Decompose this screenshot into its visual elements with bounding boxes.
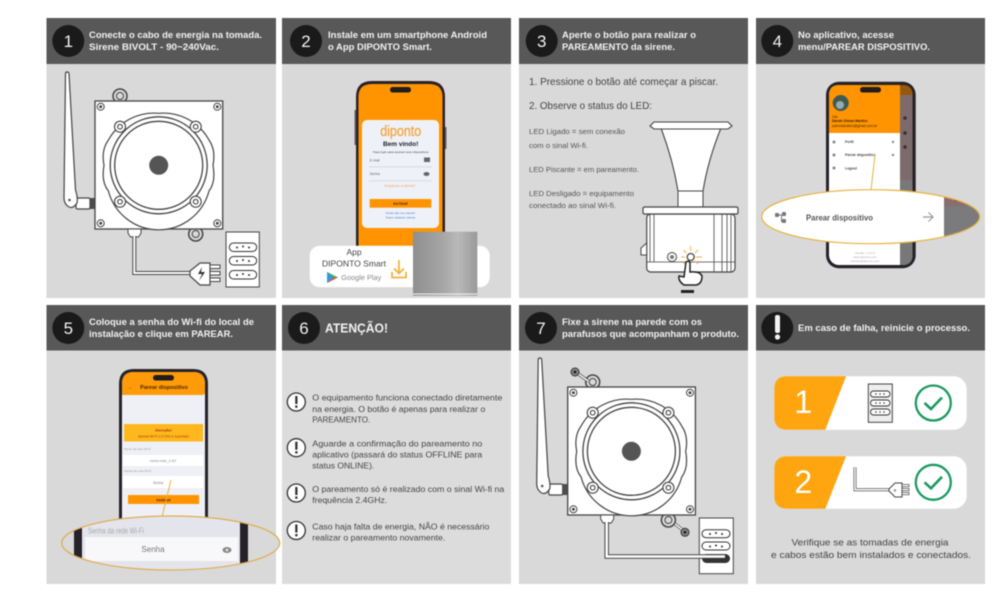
instructions	[529, 76, 718, 112]
panel: step 4	[756, 18, 985, 298]
icon: wall outlet	[226, 232, 259, 287]
callout line	[871, 155, 875, 190]
LED status legend: LED Ligado = sem conexão	[529, 129, 625, 136]
note 2	[312, 438, 483, 470]
login card	[362, 120, 439, 228]
header: step 4: No aplicativo, acesse	[798, 30, 894, 41]
icon: cable and plug: +	[893, 488, 897, 494]
header: step 1: Sirene BIVOLT - 90~240Vac.	[89, 42, 219, 53]
header: step 7: 7	[536, 319, 546, 338]
icon: warning 4	[287, 522, 305, 540]
badge: app download: DIPONTO Smart	[322, 259, 387, 269]
header: step 2: Instale em um smartphone Android	[328, 30, 487, 41]
note 1	[312, 393, 503, 424]
panel: step 5	[46, 305, 288, 584]
note 4: Caso haja falta de energia, NÃO é necessário	[312, 522, 490, 532]
phone: pairing screen: Nome da rede Wi-Fi	[124, 447, 151, 451]
closing note: e cabos estão bem instalados e conectados.	[771, 550, 971, 560]
header: step 6: ATENÇÃO!	[325, 320, 388, 336]
header: step 7: parafusos que acompanham o produto.	[562, 329, 739, 340]
note 1: PAREAMENTO.	[312, 414, 370, 424]
phone: pairing screen	[119, 369, 208, 520]
header: step 7	[519, 305, 748, 350]
header: step 3: Aperte o botão para realizar o	[562, 30, 696, 41]
callout: Senha field: Senha da rede Wi-Fi	[88, 526, 144, 536]
login card: Esqueceu a senha?	[385, 184, 416, 188]
header: step 7: Fixe a sirene na parede com os	[562, 317, 702, 328]
note 3: frequência 2.4GHz.	[312, 495, 387, 505]
illustration: siren top view with antenna and cable	[64, 72, 223, 241]
icon: wall outlet with plug	[699, 518, 733, 574]
phone: app menu: www.diponto.com	[853, 255, 877, 259]
cable	[134, 236, 190, 273]
note 4: realizar o pareamento novamente.	[312, 533, 445, 543]
phone: app menu: Dande Dimas Martins	[832, 119, 868, 123]
LED status legend: conectado ao sinal Wi-fi.	[529, 203, 616, 210]
header: step 4	[756, 18, 985, 64]
header: failure: Em caso de falha, reinicie o processo.	[798, 323, 970, 334]
header: step 1	[46, 18, 276, 64]
panel: step 1	[46, 18, 276, 298]
phone: pairing screen: Parear dispositivo	[140, 385, 188, 391]
check card 2: 2	[794, 464, 812, 500]
phone: app menu	[826, 82, 916, 268]
phone: pairing screen: ←	[128, 385, 133, 391]
blurred QR code	[413, 232, 477, 296]
login card: ENTRAR	[393, 202, 408, 206]
icon: pairing	[775, 212, 786, 223]
icon: screw top	[571, 368, 588, 381]
LED status legend: com o sinal Wi-fi.	[529, 143, 588, 150]
icon: check	[916, 465, 951, 500]
phone: pairing screen: Atenção!	[155, 428, 172, 432]
header: step 3	[519, 18, 748, 64]
header: step 1: Conecte o cabo de energia na tomada.	[89, 30, 262, 41]
header: step 6: 6	[299, 319, 309, 338]
LED rays	[681, 246, 702, 264]
panel: step 2	[282, 18, 511, 298]
phone: pairing screen: Senha	[153, 481, 163, 485]
note 2: Aguarde a confirmação do pareamento no	[312, 438, 483, 448]
note 3	[312, 484, 505, 505]
icon: exclamation	[775, 315, 780, 340]
cable plugged in	[607, 522, 725, 556]
login card: Fazer cadastro cliente	[386, 216, 416, 220]
phone: pairing screen: Senha da rede Wi-Fi	[124, 469, 152, 473]
note 4	[312, 522, 490, 543]
LED status legend: LED Piscante = em pareamento.	[529, 167, 639, 174]
cable inner	[134, 236, 190, 273]
phone: app menu: Versão: 1.0.0.0	[855, 251, 875, 255]
login card: Ainda não sou cliente!	[386, 211, 415, 215]
phone: app login screen	[354, 81, 446, 250]
header: step 2	[282, 18, 511, 64]
LED status legend: LED Desligado = equipamento	[529, 191, 634, 198]
closing note	[771, 538, 971, 560]
phone: app menu: Olá	[832, 115, 838, 119]
header: step 5: Coloque a senha do Wi-fi do local de	[89, 317, 254, 328]
icon: google play	[327, 272, 338, 283]
phone: pairing screen: nome-rede_2.4G	[150, 459, 177, 463]
icon: cable and plug	[855, 467, 909, 497]
phone: pairing screen: PAREAR	[156, 498, 171, 502]
icon: eye	[222, 547, 232, 553]
header: step 5: instalação e clique em PAREAR.	[89, 329, 233, 340]
panel: step 7	[519, 305, 748, 584]
phone: app menu: Parear dispositivo	[845, 153, 875, 157]
check card 1	[774, 376, 967, 430]
illustration: siren side view	[641, 122, 738, 293]
login card: Bem vindo!	[383, 141, 418, 148]
callout: Parear dispositivo: Parear dispositivo	[806, 213, 873, 223]
LED status legend	[529, 129, 639, 210]
phone: app menu: administrativo@gmail.com.br	[832, 124, 878, 128]
header: step 3: 3	[537, 32, 546, 51]
icon: arrow	[923, 212, 933, 222]
icon: outlet	[868, 384, 892, 422]
callout line	[162, 480, 171, 517]
phone: pairing screen: Apenas Wi-Fi 2.4 GHz é suportado	[138, 434, 189, 438]
icon: download arrow	[392, 260, 406, 278]
header: step 1: 1	[64, 32, 73, 51]
note 2: status ONLINE).	[312, 460, 374, 470]
header: step 5	[46, 305, 276, 350]
header: step 6	[282, 305, 511, 350]
badge: app download	[310, 246, 490, 287]
panel: step 3	[519, 18, 748, 298]
header: step 3: PAREAMENTO da sirene.	[562, 42, 675, 53]
instructions: 2. Observe o status do LED:	[529, 100, 652, 112]
note 1: na energia. O botão é apenas para realizar o	[312, 404, 486, 414]
icon: warning 2	[287, 439, 305, 457]
callout: Parear dispositivo	[762, 185, 984, 246]
callout: Senha field: Senha	[141, 545, 165, 554]
panel: failure	[756, 305, 985, 584]
phone: app menu: Perfil	[845, 140, 854, 144]
badge: app download: Google Play	[341, 275, 382, 282]
icon: warning 3	[287, 484, 305, 502]
icon: pressing hand	[679, 261, 702, 293]
closing note: Verifique se as tomadas de energia	[792, 538, 949, 548]
icon: check	[916, 386, 951, 420]
login card: Senha	[370, 172, 380, 176]
badge: app download: App	[346, 247, 362, 257]
note 2: aplicativo (passará do status OFFLINE para	[312, 450, 483, 460]
header: step 4: 4	[773, 32, 782, 51]
illustration: siren mounted	[537, 358, 695, 527]
login card: Faça login para acessar seus dispositivos	[373, 150, 429, 154]
icon: warning 1	[287, 393, 305, 411]
header: step 2: o App DIPONTO Smart.	[328, 42, 432, 53]
check card 1: 1	[794, 384, 812, 420]
header: step 2: 2	[301, 32, 311, 51]
header: failure	[756, 305, 985, 350]
icon: power plug	[190, 263, 220, 285]
note 1: O equipamento funciona conectado diretamente	[312, 393, 503, 403]
note 3: O pareamento só é realizado com o sinal Wi-fi na	[312, 484, 505, 494]
check card 2	[774, 456, 967, 509]
phone: app menu: contato@diponto.com	[850, 259, 880, 263]
instructions: 1. Pressione o botão até começar a piscar.	[529, 76, 718, 88]
login card: diponto	[380, 123, 421, 140]
icon: screw bottom	[675, 524, 689, 536]
phone: app menu: Logout	[845, 166, 858, 170]
callout: Senha field	[60, 514, 281, 572]
header: step 4: menu/PAREAR DISPOSITIVO.	[798, 42, 930, 53]
panel: step 6 attention	[282, 305, 511, 584]
header: step 5: 5	[64, 319, 73, 338]
login card: E-mail	[370, 159, 380, 163]
